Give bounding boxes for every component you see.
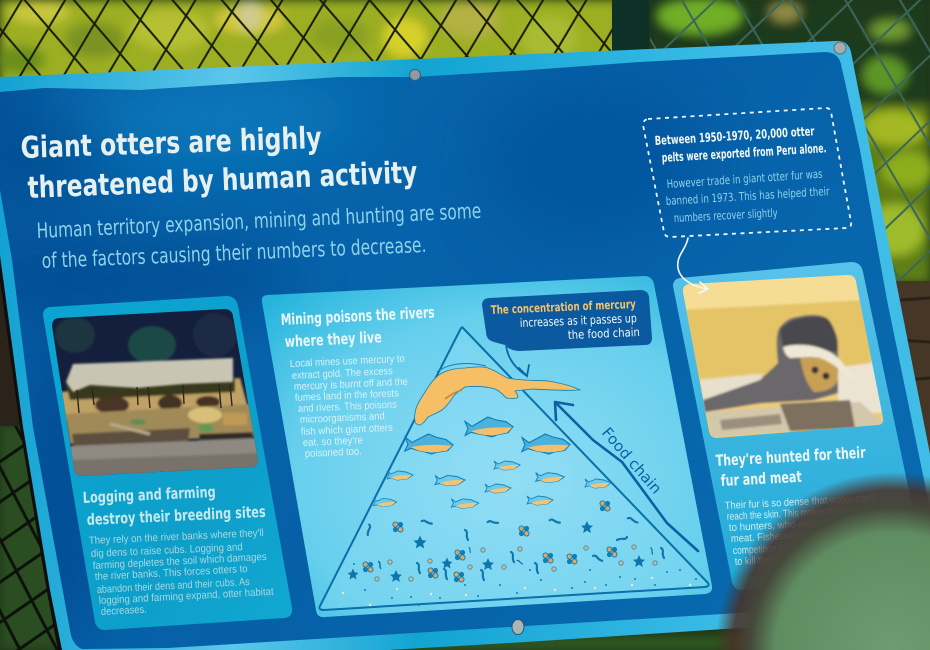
foreground: blurred visitor's head [715, 472, 930, 650]
arrow: callout to hunting photo [678, 238, 708, 293]
icon: fish row, large [405, 417, 570, 455]
heading: logging and farming [82, 483, 266, 529]
panel: logging and farming [43, 296, 292, 630]
body text: hunting [725, 493, 877, 568]
title [20, 121, 418, 206]
body text: logging and farming: the river banks. This forces otters to [95, 563, 248, 583]
sign shadow edge [0, 258, 72, 650]
title: Giant otters are highly [20, 121, 322, 166]
callout: mercury concentration: increases as it passes up [520, 311, 637, 330]
heading: mining [280, 303, 435, 351]
panel: hunting [673, 262, 926, 590]
callout: fur trade: pelts were exported from Peru alone. [661, 140, 827, 165]
callout: fur trade: banned in 1973. This has helped their [665, 184, 830, 208]
photo: logging camp [52, 309, 258, 476]
body text: hunting: to hunters, who also kill them for [729, 516, 869, 534]
body text: mining: and rivers. This poisons [298, 400, 397, 415]
icon: otter [415, 364, 580, 425]
body text: mining: fumes land in the forests [295, 388, 399, 404]
icon: plankton dots [342, 563, 697, 606]
icon: fish row, small [373, 461, 611, 508]
body text: mining: eat, so they're [303, 435, 363, 449]
panel: mining [262, 276, 712, 617]
label: food chain: Food chain [598, 424, 665, 498]
body text: mining: mercury is burnt off and the [294, 377, 408, 393]
body text: hunting: meat. Fishermen see them as [731, 527, 856, 545]
heading: mining: where they live [284, 328, 382, 351]
body text: mining: poisoned too. [305, 446, 362, 460]
callout: fur trade: Between 1950-1970, 20,000 otter [654, 123, 815, 148]
callout: fur trade [643, 108, 851, 237]
body text: hunting: reach the skin. This makes them a target [727, 504, 877, 523]
body text: logging and farming [89, 527, 274, 618]
subtitle: Human territory expansion, mining and hunting are some [36, 199, 482, 243]
body text: mining: microorganisms and [300, 411, 385, 426]
body text: hunting: to kill them. [735, 555, 781, 568]
screws [410, 42, 846, 634]
body text: logging and farming: farming depletes the soil which damages [93, 551, 267, 572]
callout: fur trade: However trade in giant otter fur was [666, 167, 823, 191]
food chain pyramid [320, 327, 709, 610]
body text: logging and farming: dig dens to raise cubs. Logging and [91, 541, 243, 560]
body text: logging and farming: They rely on the river banks where they'll [89, 527, 264, 547]
callout: mercury concentration [482, 290, 652, 376]
heading: hunting [715, 444, 866, 490]
subtitle [36, 199, 482, 273]
body text: mining: extract gold. The excess [292, 366, 393, 382]
body text: logging and farming: abandon their dens and their cubs. As [97, 576, 250, 596]
heading: hunting: They're hunted for their [715, 444, 866, 470]
body text: logging and farming: logging and farming expand, otter habitat [99, 586, 274, 607]
callout: mercury concentration: the food chain [568, 325, 640, 342]
icon: small organisms [348, 501, 664, 582]
heading: hunting: fur and meat [720, 468, 803, 490]
subtitle: of the factors causing their numbers to decrease. [41, 233, 427, 273]
thatched roof [66, 358, 233, 392]
body text: mining [290, 354, 408, 460]
body text: hunting: Their fur is so dense that water can't [725, 493, 875, 512]
heading: logging and farming: Logging and farming [82, 483, 216, 507]
callout: mercury concentration: The concentration of mercury [491, 297, 636, 317]
body text: hunting: competition for fish, leading them [733, 539, 858, 557]
heading: mining: Mining poisons the rivers [280, 303, 435, 329]
arrow: food chain [555, 402, 698, 551]
title: threatened by human activity [27, 155, 418, 206]
heading: logging and farming: destroy their breeding sites [86, 503, 266, 529]
body text: logging and farming: decreases. [101, 604, 147, 618]
callout: fur trade: numbers recover slightly [673, 206, 778, 225]
photo: otter eating fish [680, 272, 886, 442]
body text: mining: fish which giant otters [301, 423, 393, 438]
body text: mining: Local mines use mercury to [290, 354, 405, 370]
